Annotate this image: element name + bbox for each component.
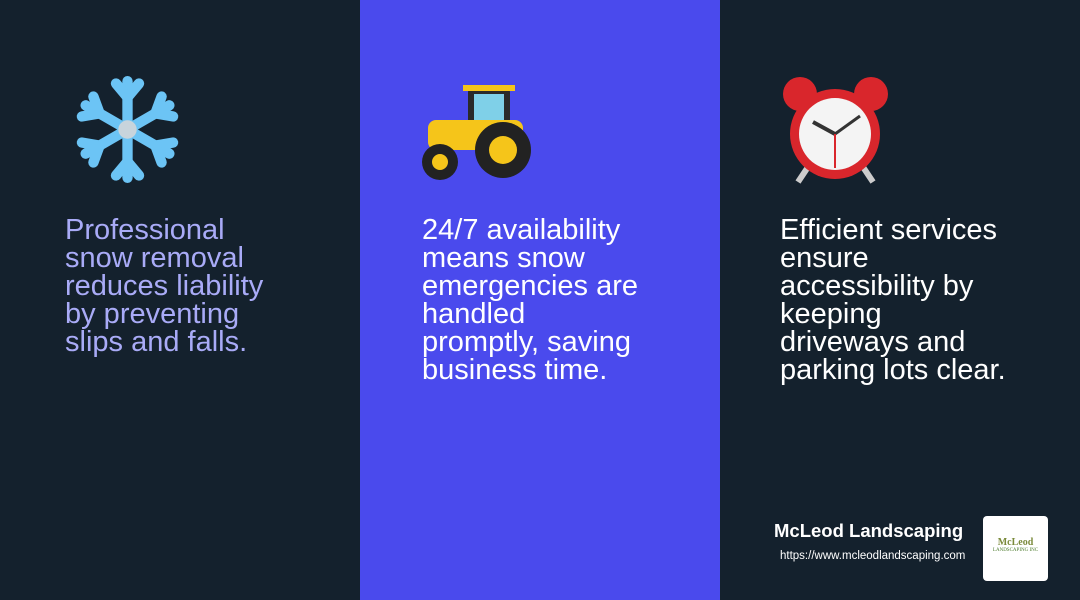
icon: tractor [422,85,531,180]
logo: LANDSCAPING INC [993,548,1038,553]
panel: efficiency [720,0,1080,600]
brand name: McLeod Landscaping [774,520,963,541]
logo: McLeod [998,537,1033,548]
url: https://www.mcleodlandscaping.com [780,550,965,562]
icon: alarm clock [783,77,888,184]
icon: snowflake [76,76,178,183]
text: availability: 24/7 availability means snow emergencies are handled promptly, saving business time. [422,214,638,386]
text: efficiency: Efficient services ensure accessibility by keeping driveways and parking lots clear. [780,214,1006,386]
footer: brand [774,516,1048,581]
text: liability: Professional snow removal reduces liability by preventing slips and falls. [65,214,263,358]
panel: availability [360,0,720,600]
logo [983,516,1048,581]
panel: liability [0,0,360,600]
